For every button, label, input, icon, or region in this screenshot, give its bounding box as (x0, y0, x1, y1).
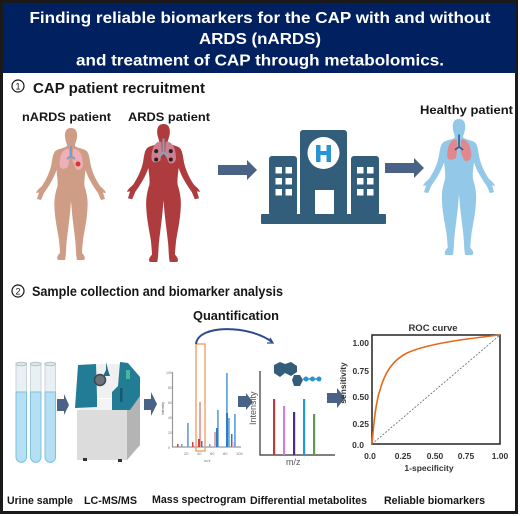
heading: section 1: CAP patient recruitment (33, 81, 205, 97)
label: LC-MS/MS: LC-MS/MS (84, 495, 137, 507)
icon: metabolite molecule (274, 362, 322, 386)
chart: differential metabolites (248, 371, 335, 467)
icon: LC-MS/MS instrument (75, 362, 140, 462)
label: Reliable biomarkers: Reliable biomarkers (384, 495, 485, 507)
chart: mass spectrogram: 20 (184, 451, 189, 456)
label: Quantification: Quantification (193, 308, 279, 323)
figure: nARDS patient body (36, 128, 106, 260)
chart: mass spectrogram: 80 (223, 451, 228, 456)
heading: section 1: 1 (15, 82, 21, 92)
chart: ROC curve: 0.75 (352, 366, 369, 376)
figure: healthy patient body (423, 119, 495, 255)
heading: section 2: 2 (15, 286, 21, 296)
chart: ROC curve: sensitivity (338, 362, 348, 404)
heading: section 2: Sample collection and biomarker analysis (32, 283, 283, 299)
chart: mass spectrogram: Intensity (161, 402, 165, 415)
chart: ROC curve: 0.25 (395, 451, 412, 461)
arrow: metabolites to ROC (327, 388, 345, 408)
icon: hospital (261, 130, 386, 224)
chart: ROC curve: 0.25 (352, 419, 369, 429)
chart: ROC curve: 0.0 (352, 440, 364, 450)
chart: mass spectrogram: 40 (197, 451, 202, 456)
arrow: tubes to LC-MS/MS (57, 394, 69, 415)
chart: ROC curve: ROC curve (408, 323, 458, 334)
chart: mass spectrogram: 20 (168, 431, 172, 435)
chart: ROC curve: 0.75 (458, 451, 475, 461)
chart: ROC curve: 0.50 (427, 451, 444, 461)
arrow: LC-MS/MS to spectrogram (144, 392, 157, 416)
label: nARDS patient: nARDS patient (22, 110, 111, 124)
chart: ROC curve (338, 323, 509, 473)
chart: mass spectrogram: 0 (168, 446, 170, 450)
chart: ROC curve: 1-specificity (404, 463, 454, 473)
title banner (3, 3, 516, 73)
figure: ARDS patient body (127, 124, 200, 262)
arrow: patients to hospital (218, 160, 257, 180)
label: Urine sample: Urine sample (7, 495, 73, 507)
chart: mass spectrogram: m/z (204, 458, 210, 463)
chart: mass spectrogram: 40 (168, 416, 172, 420)
chart: mass spectrogram: 100 (166, 371, 172, 375)
icon: urine sample tubes (16, 362, 56, 462)
highlight: selected peak box and curved arrow (196, 329, 273, 451)
chart: ROC curve: 1.00 (492, 451, 509, 461)
chart: mass spectrogram: 60 (168, 401, 172, 405)
chart: mass spectrogram (161, 371, 243, 463)
label: Mass spectrogram: Mass spectrogram (152, 494, 246, 506)
title banner: and treatment of CAP through metabolomics. (76, 52, 444, 70)
arrow: spectrogram to metabolites (238, 393, 253, 410)
chart: ROC curve: 0.50 (352, 392, 369, 402)
title banner: ARDS (nARDS) (199, 31, 321, 48)
title banner: Finding reliable biomarkers for the CAP with and without (30, 10, 491, 27)
chart: differential metabolites: m/z (286, 457, 301, 467)
chart: differential metabolites: Intensity (248, 391, 258, 425)
chart: ROC curve: 0.0 (364, 451, 376, 461)
label: Differential metabolites: Differential metabolites (250, 495, 367, 507)
chart: mass spectrogram: 60 (210, 451, 215, 456)
chart: ROC curve: 1.00 (352, 338, 369, 348)
label: ARDS patient: ARDS patient (128, 110, 210, 124)
arrow: hospital to healthy patient (385, 158, 424, 178)
chart: mass spectrogram: 100 (236, 451, 243, 456)
chart: mass spectrogram: 80 (168, 386, 172, 390)
label: Healthy patient: Healthy patient (420, 103, 513, 117)
